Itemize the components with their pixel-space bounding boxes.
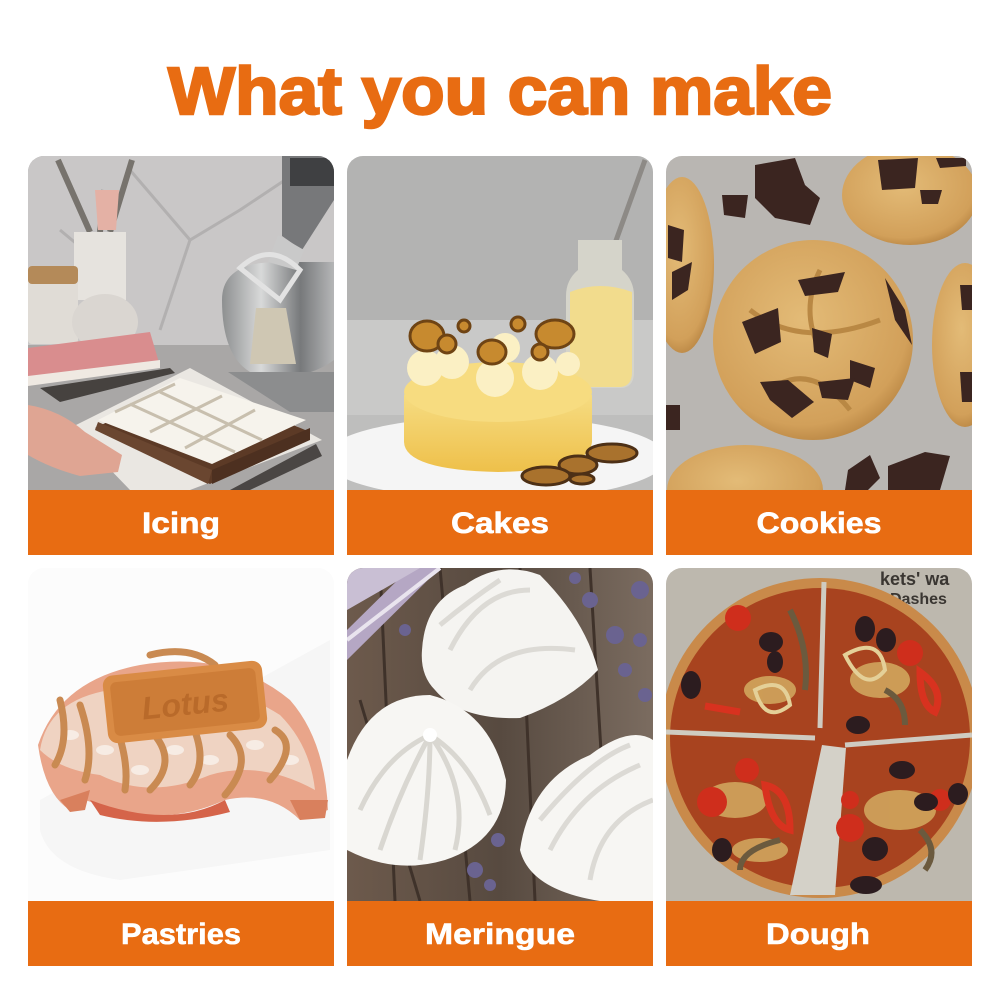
photo: stand mixer and iced bars	[28, 156, 334, 490]
pizza	[660, 578, 980, 898]
bottle and straw	[614, 159, 648, 240]
spiral notebook	[40, 368, 175, 402]
utensils	[58, 160, 132, 232]
label bar: Icing: Icing	[142, 507, 220, 540]
label bar: Icing	[28, 490, 334, 555]
cake body	[404, 395, 592, 472]
label bar: Cookies	[666, 490, 972, 555]
label bar: Meringue	[347, 901, 653, 966]
label bar: Dough: Dough	[766, 918, 870, 951]
mixer	[222, 262, 334, 376]
label bar: Pastries: Pastries	[121, 918, 241, 951]
panel: cakes	[347, 156, 653, 555]
panel: dough	[660, 568, 980, 966]
photo: sliced pizza on newspaper	[660, 568, 980, 901]
title: What you can make	[168, 54, 832, 129]
meringue left	[347, 695, 506, 866]
cream swirls	[407, 333, 580, 397]
biscuit lettering: Lotus	[140, 682, 230, 726]
bars	[95, 423, 306, 484]
peppers	[697, 605, 951, 842]
label bar: Meringue: Meringue	[425, 918, 575, 951]
photo: sliced pizza on newspaper: kets' wa	[880, 569, 950, 589]
meringue right	[520, 735, 653, 901]
anchovies and onion	[740, 610, 931, 870]
panel: icing	[28, 156, 334, 555]
meringue top	[422, 569, 598, 718]
caramel drizzle	[55, 652, 286, 795]
panel: meringue	[347, 568, 653, 966]
label bar: Cakes	[347, 490, 653, 555]
photo: meringues on wood with lavender	[347, 568, 653, 901]
dried orange slices	[410, 317, 574, 364]
label bar: Pastries	[28, 901, 334, 966]
photo: sliced pizza on newspaper: Dashes	[890, 591, 947, 608]
label bar: Cakes: Cakes	[451, 507, 549, 540]
panel: pastries	[28, 640, 334, 966]
almonds	[61, 730, 299, 775]
slices on plate	[522, 444, 637, 485]
photo: chocolate chip cookies	[666, 156, 972, 490]
photo: orange-topped cake	[347, 156, 653, 490]
books	[28, 332, 158, 376]
parchment	[70, 368, 322, 490]
croissant	[38, 662, 328, 820]
lavender	[399, 572, 652, 891]
photo: almond croissant with biscuit	[38, 640, 330, 880]
cut lines	[666, 582, 972, 745]
cheese patches	[703, 662, 936, 862]
panel: cookies	[666, 156, 972, 555]
hand	[28, 405, 122, 476]
biscuit	[102, 660, 268, 744]
olives	[681, 616, 968, 894]
label bar: Dough	[666, 901, 972, 966]
label bar: Cookies: Cookies	[756, 507, 882, 540]
plate	[347, 422, 653, 490]
